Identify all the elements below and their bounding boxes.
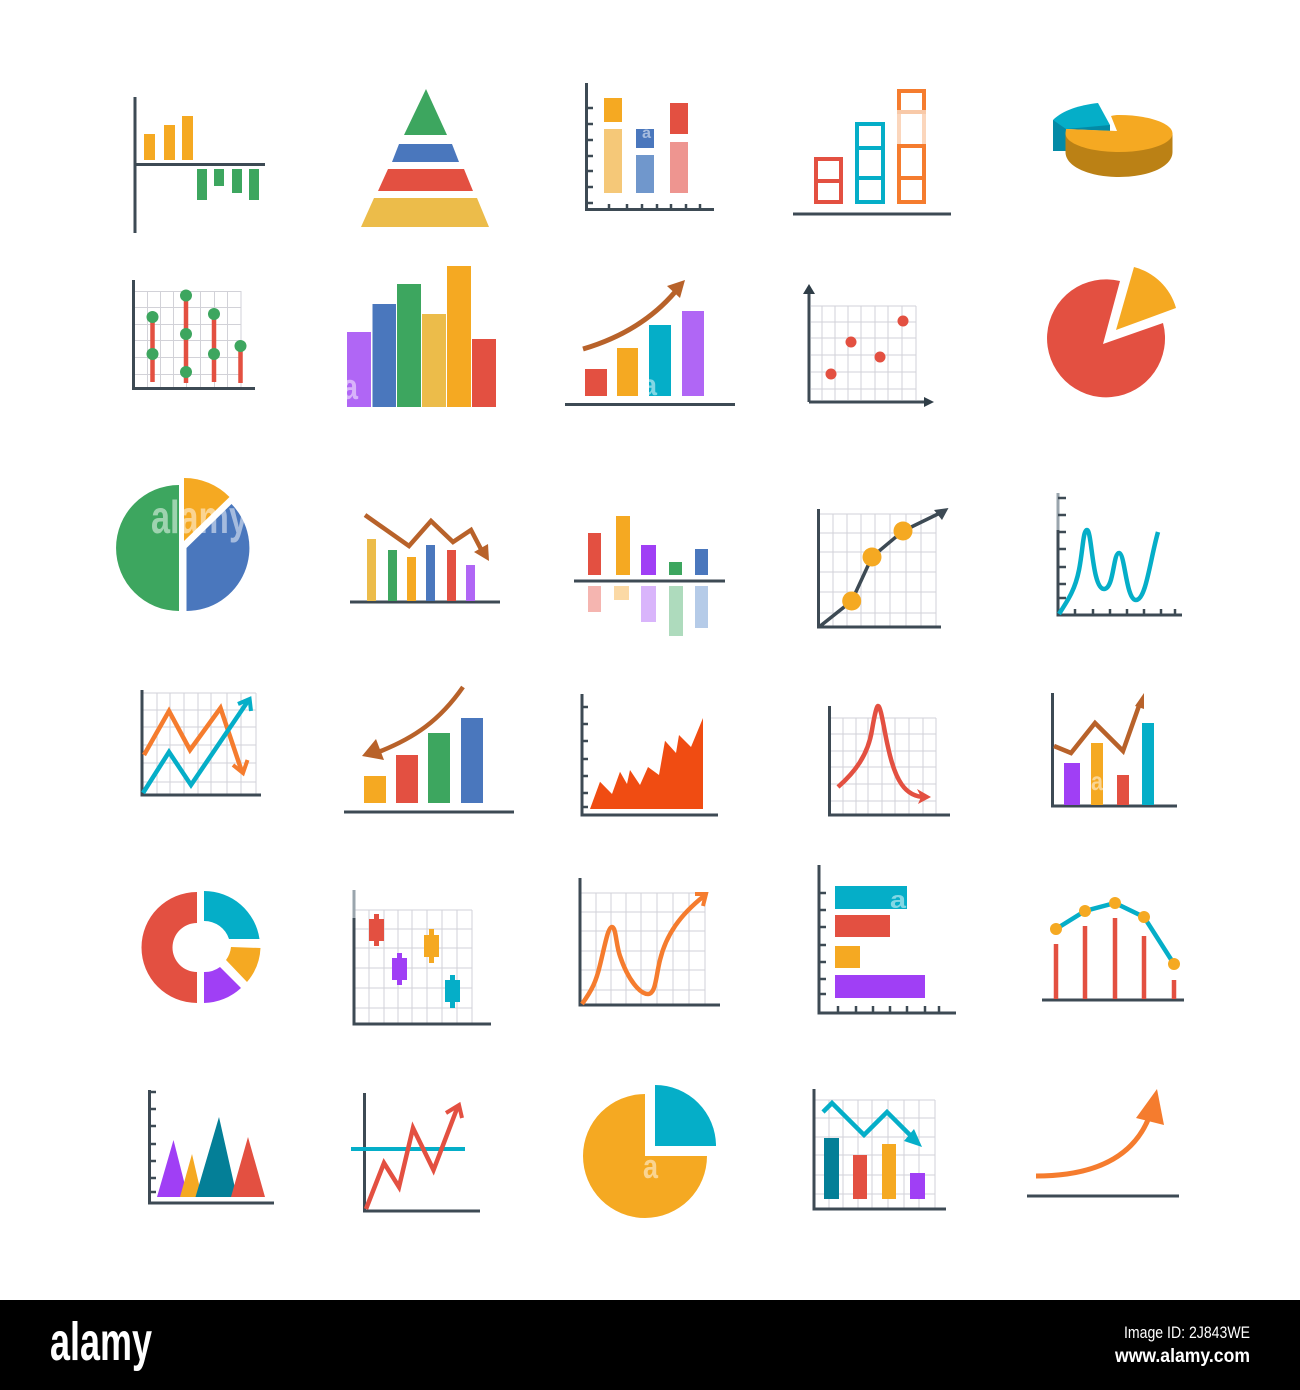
icon: pyramid chart xyxy=(361,89,489,227)
icon: 3D pie chart xyxy=(1053,103,1172,177)
icon: bars with falling line xyxy=(350,515,500,602)
icon: quarter-cut pie chart: a xyxy=(643,1148,659,1186)
icon: positive and negative bar chart xyxy=(135,97,265,233)
icon: scatter plot with arrows xyxy=(803,284,934,407)
icon: mirrored bar chart xyxy=(574,516,725,636)
icon: donut chart xyxy=(142,891,260,1003)
icon: candlestick chart xyxy=(352,890,491,1025)
icon: quarter-cut pie chart xyxy=(583,1085,716,1218)
icon: triangle area chart xyxy=(148,1090,274,1204)
icon: zigzag line with baseline marker xyxy=(351,1093,480,1212)
icon: curve with arrow on grid xyxy=(578,878,720,1006)
icon: bars with zigzag growth line xyxy=(1051,693,1177,807)
icon: wavy line chart with ticks xyxy=(1056,493,1182,616)
icon: rising bars with growth arrow: a xyxy=(642,369,657,402)
icon: rising bars with growth arrow xyxy=(565,280,735,404)
icon: crossing lines on grid xyxy=(140,690,261,796)
icon: outlined segmented bars xyxy=(793,91,951,214)
icon: adjacent colour bars: a xyxy=(342,366,359,407)
footer: alamy logo: alamy xyxy=(50,1312,152,1372)
icon: stacked bar chart with ticks xyxy=(585,83,714,210)
icon: line with points on grid xyxy=(817,508,948,628)
bars: green negative xyxy=(197,169,259,200)
icon: dotted line over stick bars xyxy=(1042,897,1184,1000)
bars: orange positive xyxy=(144,116,193,160)
icon: bars with zigzag growth line: a xyxy=(1091,766,1103,796)
footer: image id: Image ID: 2J843WE xyxy=(1124,1323,1250,1342)
icon: bell curve on grid xyxy=(828,706,950,816)
icon: three-slice pie chart xyxy=(116,478,249,611)
footer bar xyxy=(0,1300,1300,1390)
footer: website: www.alamy.com xyxy=(1114,1346,1250,1367)
icon: three-slice pie chart: alamy xyxy=(151,491,248,543)
icon: adjacent colour bars xyxy=(342,266,496,407)
icon: lollipop chart on grid xyxy=(132,280,255,389)
icon: single growth curve arrow xyxy=(1027,1089,1179,1196)
icon: pie chart with extracted slice xyxy=(1047,267,1176,397)
icon: rising bars with backward arrow xyxy=(344,687,514,812)
icon: area chart with ticks xyxy=(580,694,718,816)
icon: stacked bar chart with ticks: a xyxy=(642,125,651,142)
icon: horizontal bar chart xyxy=(818,865,956,1014)
icon: bars with falling arrow on grid xyxy=(812,1089,946,1210)
icon: horizontal bar chart: a xyxy=(890,887,907,914)
